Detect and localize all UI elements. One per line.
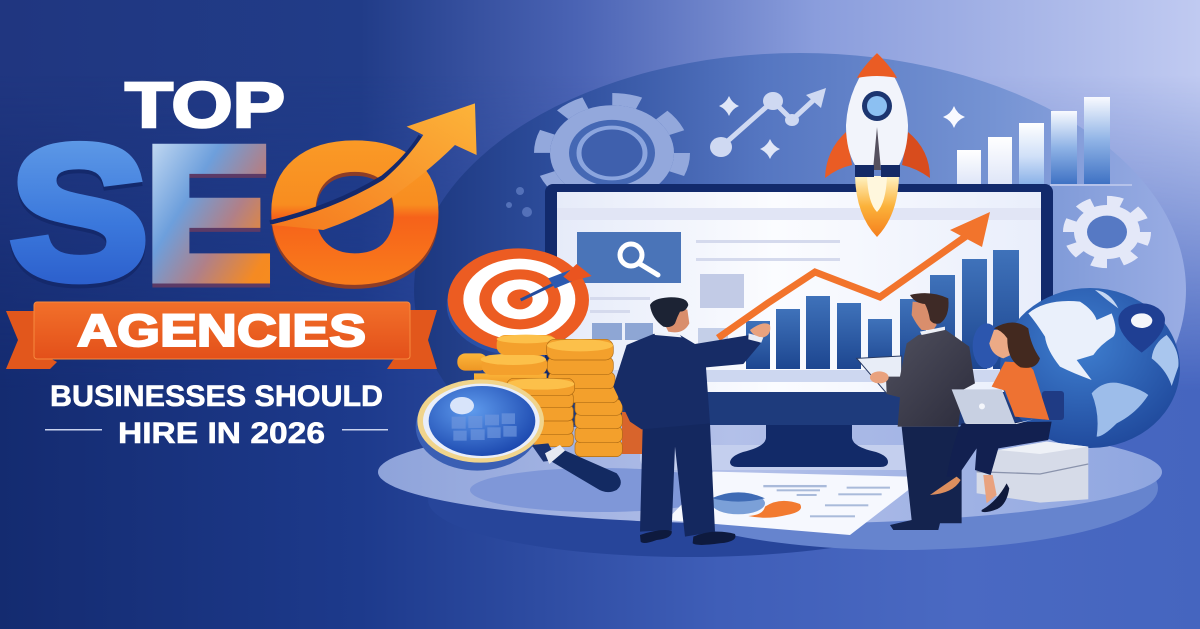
greenland — [1095, 290, 1118, 308]
lens glare — [450, 397, 474, 414]
hair — [650, 297, 688, 327]
small bar chart — [957, 97, 1132, 186]
tablet — [857, 356, 902, 393]
growth arrow — [718, 212, 990, 338]
handle — [532, 443, 621, 492]
SEO — [10, 107, 442, 324]
headline text — [6, 69, 477, 450]
monitor frame — [545, 184, 1053, 425]
icon: small gear — [1069, 201, 1145, 263]
AGENCIES ribbon — [6, 302, 437, 369]
target with dart — [447, 248, 592, 355]
shoes — [640, 530, 672, 543]
search box — [577, 232, 681, 283]
map pin — [1118, 303, 1165, 353]
monitor — [545, 184, 1053, 467]
globe — [1000, 288, 1180, 448]
TOP: TOP — [125, 69, 285, 141]
head — [665, 309, 689, 332]
SEO: E — [144, 112, 273, 324]
body — [846, 53, 908, 165]
south america — [1092, 383, 1148, 437]
SEO: O — [268, 111, 442, 323]
flame — [855, 176, 899, 237]
collar — [920, 327, 945, 335]
fins — [825, 132, 852, 178]
subtitle rules — [45, 429, 388, 430]
SEO: E — [144, 108, 273, 320]
SEO: S — [10, 111, 149, 323]
lens grid — [452, 413, 517, 441]
SEO: S — [10, 107, 149, 319]
monitor chin — [545, 392, 1053, 425]
screen bar chart — [746, 250, 1019, 369]
swoosh arrow — [270, 103, 477, 230]
subtitle line two: HIRE IN 2026 — [118, 417, 325, 450]
SEO: O — [268, 107, 442, 319]
backdrop dome — [414, 53, 1186, 527]
center fin and nozzle — [873, 127, 881, 170]
coin stacks — [457, 335, 622, 457]
lens frame — [416, 383, 539, 471]
dart — [521, 264, 592, 300]
ribbon band — [34, 302, 410, 359]
calf and heels — [983, 475, 997, 503]
north america — [1028, 301, 1115, 380]
blazer — [992, 362, 1049, 420]
rocket — [825, 53, 930, 237]
window — [862, 91, 892, 121]
africa edge — [1152, 335, 1178, 386]
front stack — [507, 378, 575, 447]
icon: trend line — [710, 88, 826, 157]
orange box behind man — [622, 412, 650, 454]
storage box — [977, 442, 1088, 503]
legs — [947, 422, 1052, 477]
icon: large gear — [542, 99, 682, 207]
chair sphere — [973, 323, 1001, 369]
back coins — [457, 335, 556, 387]
trousers — [890, 427, 962, 530]
ribbon tails — [6, 311, 57, 369]
trousers — [640, 423, 715, 537]
subtitle: BUSINESSES SHOULD — [50, 380, 383, 413]
document on floor — [667, 472, 908, 535]
laptop — [952, 389, 1015, 423]
magnifying glass — [416, 379, 621, 492]
monitor stand — [730, 425, 888, 467]
head — [912, 302, 937, 330]
face — [989, 328, 1011, 358]
man with tablet — [857, 293, 975, 530]
right stack — [547, 339, 622, 457]
cuff and hand — [748, 333, 763, 343]
hair — [910, 293, 949, 324]
chair back — [1042, 391, 1064, 420]
collar and neck — [653, 332, 682, 337]
decorative dots — [506, 187, 532, 217]
placeholder lines — [590, 240, 840, 345]
ground platform — [378, 420, 1162, 557]
suit — [886, 329, 975, 427]
man pointing — [613, 297, 770, 545]
icon: sparkles — [719, 96, 965, 159]
hair — [994, 322, 1040, 368]
AGENCIES: AGENCIES — [77, 305, 366, 356]
suit — [613, 333, 761, 429]
screen — [557, 192, 1041, 392]
woman with laptop — [930, 322, 1052, 512]
hand — [870, 371, 889, 383]
